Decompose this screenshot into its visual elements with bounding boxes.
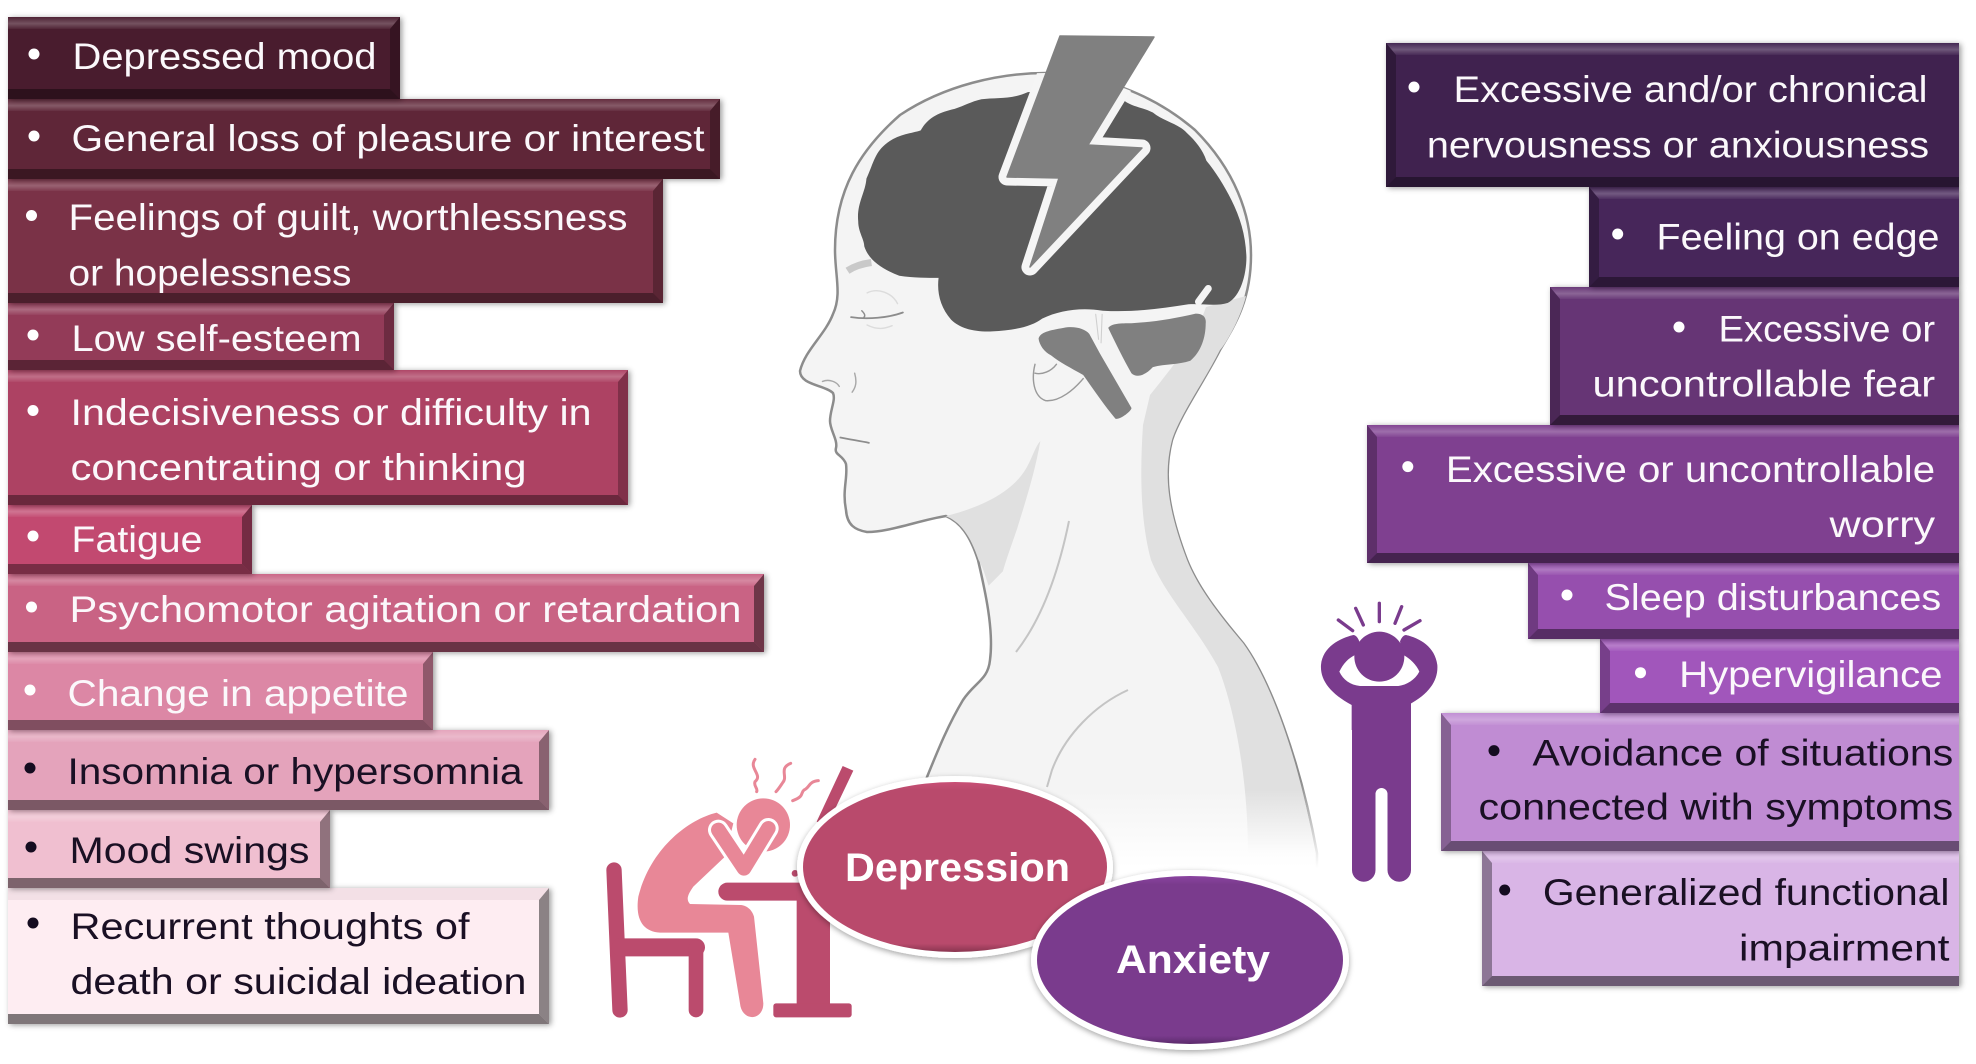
symptom: Generalized functional impairment: Generalized functional: [1543, 872, 1950, 913]
symptom: Excessive worry: [1367, 425, 1959, 563]
symptom: Feeling on edge: Feeling on edge: [1656, 217, 1940, 258]
stress rays: [1338, 603, 1420, 631]
symptom: Low self-esteem: Low self-esteem: [72, 318, 362, 359]
oval: Depression: Depression: [845, 846, 1070, 890]
chair: [614, 870, 696, 1010]
person: [638, 798, 790, 1017]
symptom: Feelings of guilt: or hopelessness: [68, 252, 352, 294]
symptom: Generalized functional impairment: [1482, 851, 1959, 986]
symptom: Low self-esteem: [8, 303, 394, 370]
oval: Depression: [797, 776, 1113, 958]
arms: [1321, 635, 1437, 730]
symptom: Fatigue: [8, 505, 252, 574]
symptom: Avoidance: connected with symptoms: [1478, 787, 1953, 828]
panel: anxiety symptoms: [1367, 43, 1959, 986]
symptom: Insomnia: Insomnia or hypersomnia: [68, 751, 523, 792]
cerebellum: [1108, 314, 1206, 376]
back shadow: [1141, 296, 1315, 853]
symptom: Avoidance: Avoidance of situations: [1532, 733, 1953, 774]
symptom: Excessive worry: worry: [1828, 504, 1936, 545]
under chin shadow: [946, 441, 1040, 586]
symptom: Depressed mood: Depressed mood: [72, 36, 376, 77]
brain notch: [1199, 289, 1208, 302]
stress squiggles: [753, 759, 818, 801]
symptom: Change in appetite: Change in appetite: [68, 673, 408, 714]
torso and legs: [1352, 700, 1411, 882]
symptom: Excessive fear: Excessive or: [1718, 308, 1935, 350]
symptom: Indecisiveness: Indecisiveness or difficulty in: [70, 392, 592, 433]
symptom: Avoidance: [1441, 713, 1959, 851]
symptom: Psychomotor: Psychomotor agitation or retardation: [70, 589, 742, 630]
icon: anxious person: [1321, 603, 1437, 882]
symptom: Mood swings: [8, 810, 330, 888]
face features: [822, 262, 1102, 443]
symptom: Sleep disturbances: [1528, 563, 1959, 639]
head and torso silhouette: [800, 73, 1317, 875]
symptom: Feelings of guilt: Feelings of guilt, worthlessness: [68, 197, 628, 238]
symptom: Feelings of guilt: [8, 179, 663, 303]
oval: Anxiety: [1031, 870, 1349, 1050]
symptom: Fatigue: Fatigue: [72, 519, 202, 560]
symptom: Recurrent thoughts: Recurrent thoughts of: [70, 906, 470, 947]
symptom: Indecisiveness: concentrating or thinking: [70, 447, 526, 488]
symptom: Hypervigilance: [1600, 639, 1959, 713]
symptom: Recurrent thoughts: death or suicidal ideation: [70, 961, 526, 1002]
symptom: Psychomotor: [8, 574, 764, 652]
symptom: Feeling on edge: [1589, 187, 1959, 287]
symptom: Excessive fear: uncontrollable fear: [1592, 364, 1935, 405]
symptom: Insomnia: [8, 730, 549, 810]
symptom: General loss: [8, 99, 720, 179]
panel: head illustration: [800, 36, 1317, 875]
symptom: Hypervigilance: Hypervigilance: [1679, 654, 1942, 695]
symptom: Change in appetite: [8, 652, 433, 730]
icon: depressed person at desk: [614, 759, 853, 1017]
shoulder and neck lines: [1016, 521, 1128, 787]
brain stem: [1039, 327, 1131, 419]
symptom: Excessive nervousness: nervousness or anxiousness: [1427, 125, 1929, 166]
symptom: Mood swings: Mood swings: [70, 830, 310, 871]
brain and face details: [822, 89, 1246, 586]
head: [1354, 632, 1404, 682]
symptom: Generalized functional impairment: impairment: [1739, 928, 1950, 968]
desk and laptop: [718, 766, 853, 1017]
symptom: Recurrent thoughts: [8, 888, 549, 1024]
oval: Anxiety: Anxiety: [1116, 938, 1271, 982]
symptom: Excessive worry: Excessive or uncontrollable: [1446, 449, 1935, 490]
panel: depression symptoms: [8, 17, 764, 1024]
lightning bolt: [1007, 36, 1154, 267]
symptom: Excessive fear: [1550, 287, 1959, 425]
symptom: General loss: General loss of pleasure or interest: [72, 118, 705, 159]
symptom: Depressed mood: [8, 17, 400, 99]
symptom: Excessive nervousness: Excessive and/or chronical: [1454, 69, 1928, 110]
symptom: Excessive nervousness: [1386, 43, 1959, 187]
symptom: Indecisiveness: [8, 370, 628, 505]
brain: [858, 89, 1246, 332]
symptom: Sleep disturbances: Sleep disturbances: [1604, 577, 1941, 618]
